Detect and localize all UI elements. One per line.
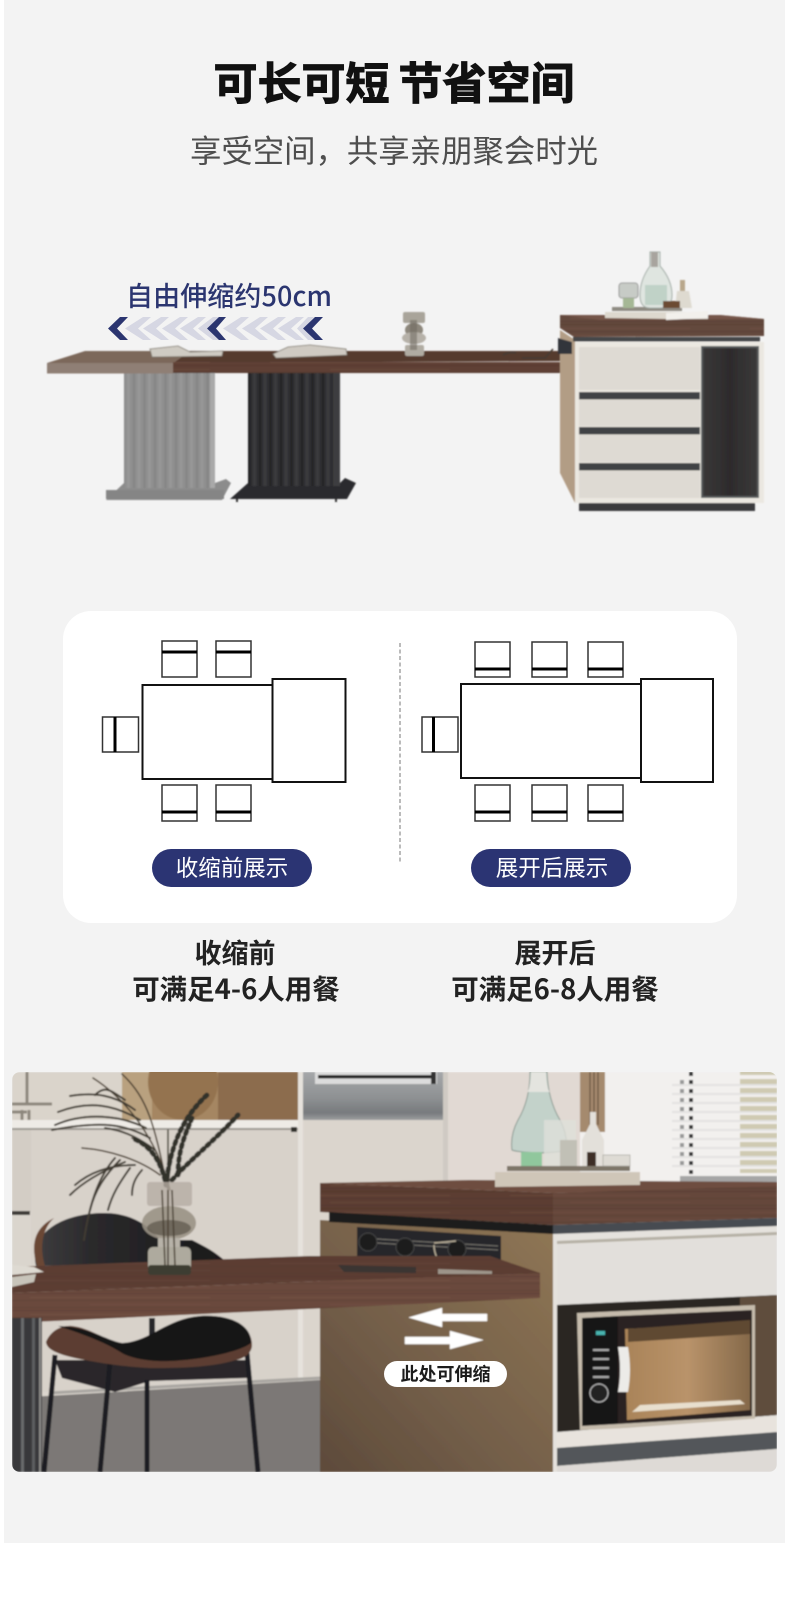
subtitle: 享受空间，共享亲朋聚会时光 [190,127,598,172]
microwave niche [557,1295,777,1432]
palm frond ribs [82,1074,170,1190]
left arrow [409,1308,487,1327]
tan cabinet side [320,1220,553,1472]
pill: retracted: 收缩前展示 [176,851,288,883]
chairs retracted [102,641,251,821]
stretch label: 自由伸缩约50cm [126,275,332,314]
white seating panel [63,611,737,923]
gray pedestal leg (retracted) [106,373,231,500]
table rectangle extended [461,684,641,778]
walnut tabletop [173,351,573,373]
drawers [579,347,700,498]
wall appliance [303,1072,443,1120]
stool seat black cushion [58,1316,251,1361]
stool chair back pole [149,1318,155,1336]
eucalyptus leaves [132,1095,238,1185]
palm frond leaves [52,1090,155,1240]
cabinet lower bands [557,1417,777,1472]
cable on desk [503,349,553,358]
extending table top [12,1256,540,1323]
title: 可长可短 节省空间 [214,48,574,112]
pill: extended: 展开后展示 [496,851,608,883]
cabinet walnut top [560,315,764,337]
cabinet rectangle retracted [272,679,346,782]
seating plan: retracted [102,641,346,821]
kitchen scene photo [12,1044,777,1472]
chair wood edge [34,1218,54,1266]
stool legs [44,1353,258,1472]
plinth [579,503,755,511]
caption: retracted: 收缩前 [194,932,276,971]
chevron arrow band [108,317,323,340]
dining chair back [35,1213,226,1266]
walnut countertop [320,1180,777,1225]
pill: retracted [152,849,312,887]
right arrow [405,1331,483,1349]
caption: extended [451,932,659,1007]
seating plan: extended [422,642,713,821]
baseboard line [50,1378,320,1393]
book at edge [12,1265,44,1287]
eucalyptus stems [130,1128,172,1183]
microwave [577,1305,755,1430]
storage cabinet [558,252,764,511]
pill: extended [471,849,631,887]
divider [399,643,401,863]
window with blinds [580,1071,777,1187]
cabinet frame [575,342,764,503]
caption: retracted [132,932,340,1007]
floor [12,1380,320,1472]
tray with decor [605,252,708,320]
dark open compartment [702,347,758,497]
stool [44,1316,258,1472]
table rectangle retracted [142,685,272,779]
glass vase [142,1182,196,1275]
cabinet right front [553,1224,777,1472]
extendable table product [47,252,764,511]
chairs extended [422,642,623,821]
caption: extended: 可满足6-8人用餐 [451,967,659,1007]
socket strip [356,1226,502,1260]
open book right [273,345,347,358]
cabinet rectangle extended [641,679,713,782]
stretch here label: 此处可伸缩 [400,1360,490,1386]
phone on table [338,1265,416,1273]
background walls and cabinets [12,1072,580,1396]
dark strip under top [573,337,760,342]
dried plant [52,1074,238,1240]
black pedestal leg (extended) [230,373,356,502]
faucet [12,1072,52,1120]
cabinet side [560,330,575,503]
ghost tabletop segment [47,351,190,374]
tray and bottles [495,1072,640,1187]
socket connector [558,338,572,354]
shadow strip under top [329,1212,777,1234]
caption: extended: 展开后 [514,932,596,971]
open book left [150,346,223,357]
wireless plate [438,1269,492,1274]
glass sculpture [402,312,426,356]
caption: retracted: 可满足4-6人用餐 [132,967,340,1007]
stool seat wood shell [45,1325,253,1369]
stool frame [55,1360,247,1392]
pedestal leg [12,1318,42,1472]
